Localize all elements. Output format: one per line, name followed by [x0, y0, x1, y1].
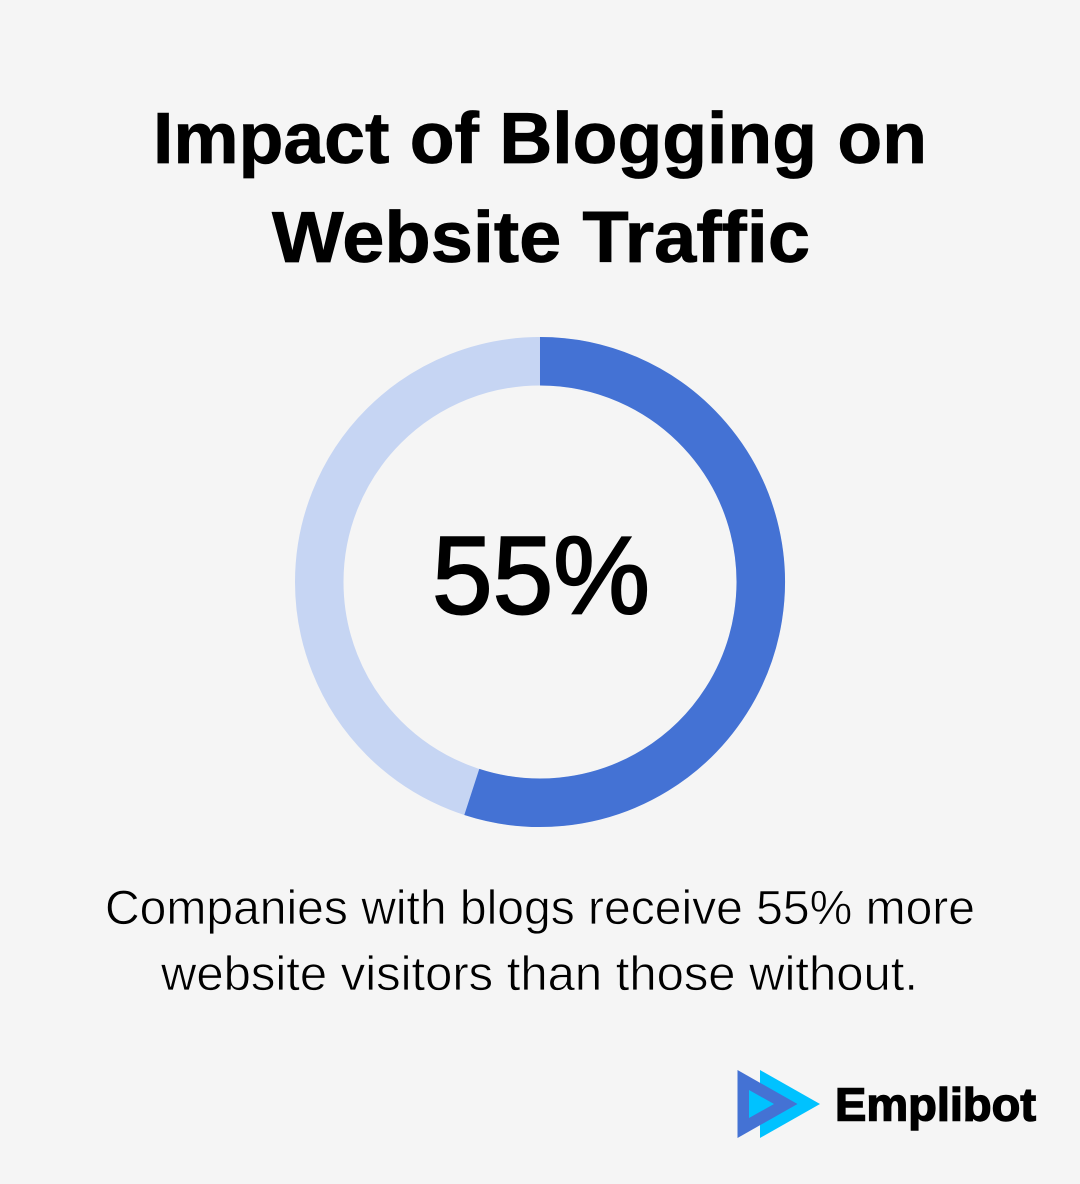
- description text: website visitors than those without.: [160, 948, 918, 1001]
- logo wordmark: Emplibot: [835, 1078, 1036, 1130]
- icon: blue play triangle: [738, 1070, 798, 1138]
- title: [153, 99, 927, 278]
- title: Impact of Blogging on: [153, 99, 927, 179]
- icon: inner cyan triangle: [749, 1090, 774, 1118]
- logo: Emplibot: [738, 1070, 1036, 1138]
- description text: [105, 882, 975, 1001]
- icon: cyan play triangle: [760, 1070, 820, 1138]
- donut chart: 55%: [319, 361, 761, 803]
- title: Website Traffic: [272, 198, 810, 278]
- donut value arc: [472, 361, 761, 803]
- donut track: [319, 361, 761, 803]
- donut centre value: 55%: [432, 514, 650, 638]
- description text: Companies with blogs receive 55% more: [105, 882, 975, 935]
